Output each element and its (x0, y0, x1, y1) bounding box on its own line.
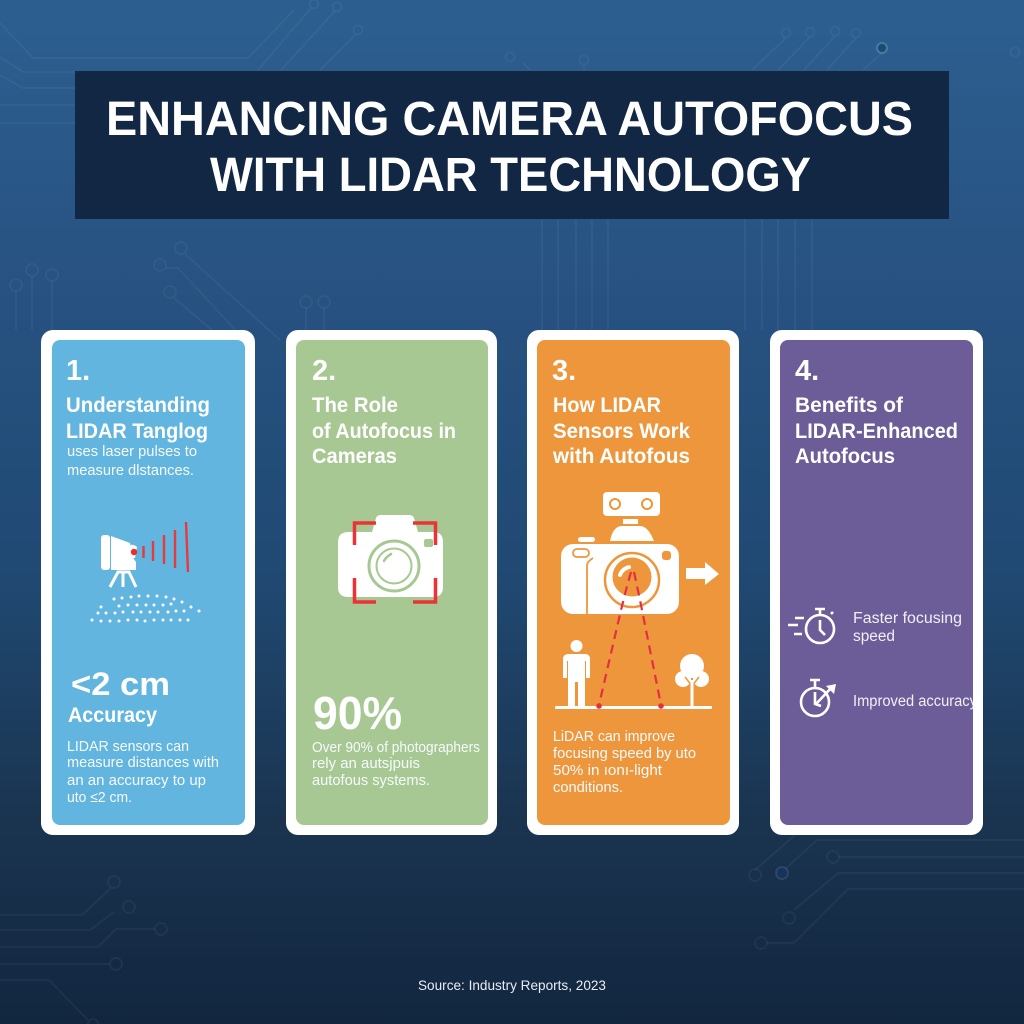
heading 1: Understanding (66, 394, 210, 417)
panel 1: understanding LIDAR (41, 330, 255, 835)
description 1: uto ≤2 cm. (67, 790, 132, 806)
description 2: rely an autsjpuis (312, 756, 420, 772)
number 1: 1. (66, 355, 90, 387)
description 2: Over 90% of photographers (312, 740, 480, 756)
description 3: conditions. (553, 780, 623, 796)
heading 4: Benefits of (795, 394, 904, 417)
panel 3: how LIDAR works (527, 330, 739, 835)
description 3: LiDAR can improve (553, 729, 675, 745)
title text: ENHANCING CAMERA AUTOFOCUS (106, 93, 913, 146)
description 1 (67, 739, 219, 806)
title text (106, 93, 913, 202)
heading 2: The Role (312, 394, 398, 417)
circuit nodes (776, 43, 887, 879)
intro text: uses laser pulses to (67, 444, 197, 460)
stat: 90%: 90% (313, 687, 402, 739)
source note: Source: Industry Reports, 2023 (418, 977, 606, 993)
panel 2: role of autofocus (286, 330, 497, 835)
number 3: 3. (552, 355, 576, 387)
intro text (67, 444, 197, 479)
benefit: faster focusing (853, 610, 962, 645)
title text: WITH LIDAR TECHNOLOGY (210, 149, 811, 202)
heading 2: of Autofocus in (312, 420, 456, 443)
title banner (75, 71, 949, 219)
benefit: improved accuracy: Improved accuracy (853, 693, 977, 710)
icon: camera with focus brackets (338, 515, 443, 602)
heading 3: How LIDAR (553, 394, 661, 417)
benefit: faster focusing: speed (853, 628, 895, 645)
heading 2: Cameras (312, 445, 397, 468)
description 3: 50% in ıonı-light (553, 763, 662, 779)
number 2: 2. (312, 355, 336, 387)
heading 3: Sensors Work (553, 420, 690, 443)
benefit: faster focusing: Faster focusing (853, 610, 962, 627)
description 1: measure distances with (67, 755, 219, 771)
panel 4: benefits (770, 330, 983, 835)
stat: under 2 cm: <2 cm (71, 666, 170, 702)
icon: stopwatch with speed lines (788, 609, 834, 643)
stat label: accuracy: Accuracy (68, 704, 157, 727)
description 3 (553, 729, 696, 796)
description 1: LIDAR sensors can (67, 739, 189, 755)
heading 4: Autofocus (795, 445, 895, 468)
number 4: 4. (795, 355, 819, 387)
description 2 (312, 740, 480, 789)
icon: stopwatch with arrow (801, 680, 836, 716)
heading 1: LIDAR Tanglog (66, 420, 208, 443)
description 1: an an accuracy to up (67, 773, 206, 789)
icon: camera with LIDAR sensor (555, 492, 719, 709)
description 3: focusing speed by uto (553, 746, 696, 762)
description 2: autofous systems. (312, 773, 430, 789)
icon: LIDAR scanner (90, 522, 200, 622)
intro text: measure dlstances. (67, 463, 194, 479)
heading 3: with Autofous (552, 445, 690, 468)
heading 4: LIDAR-Enhanced (795, 420, 958, 443)
